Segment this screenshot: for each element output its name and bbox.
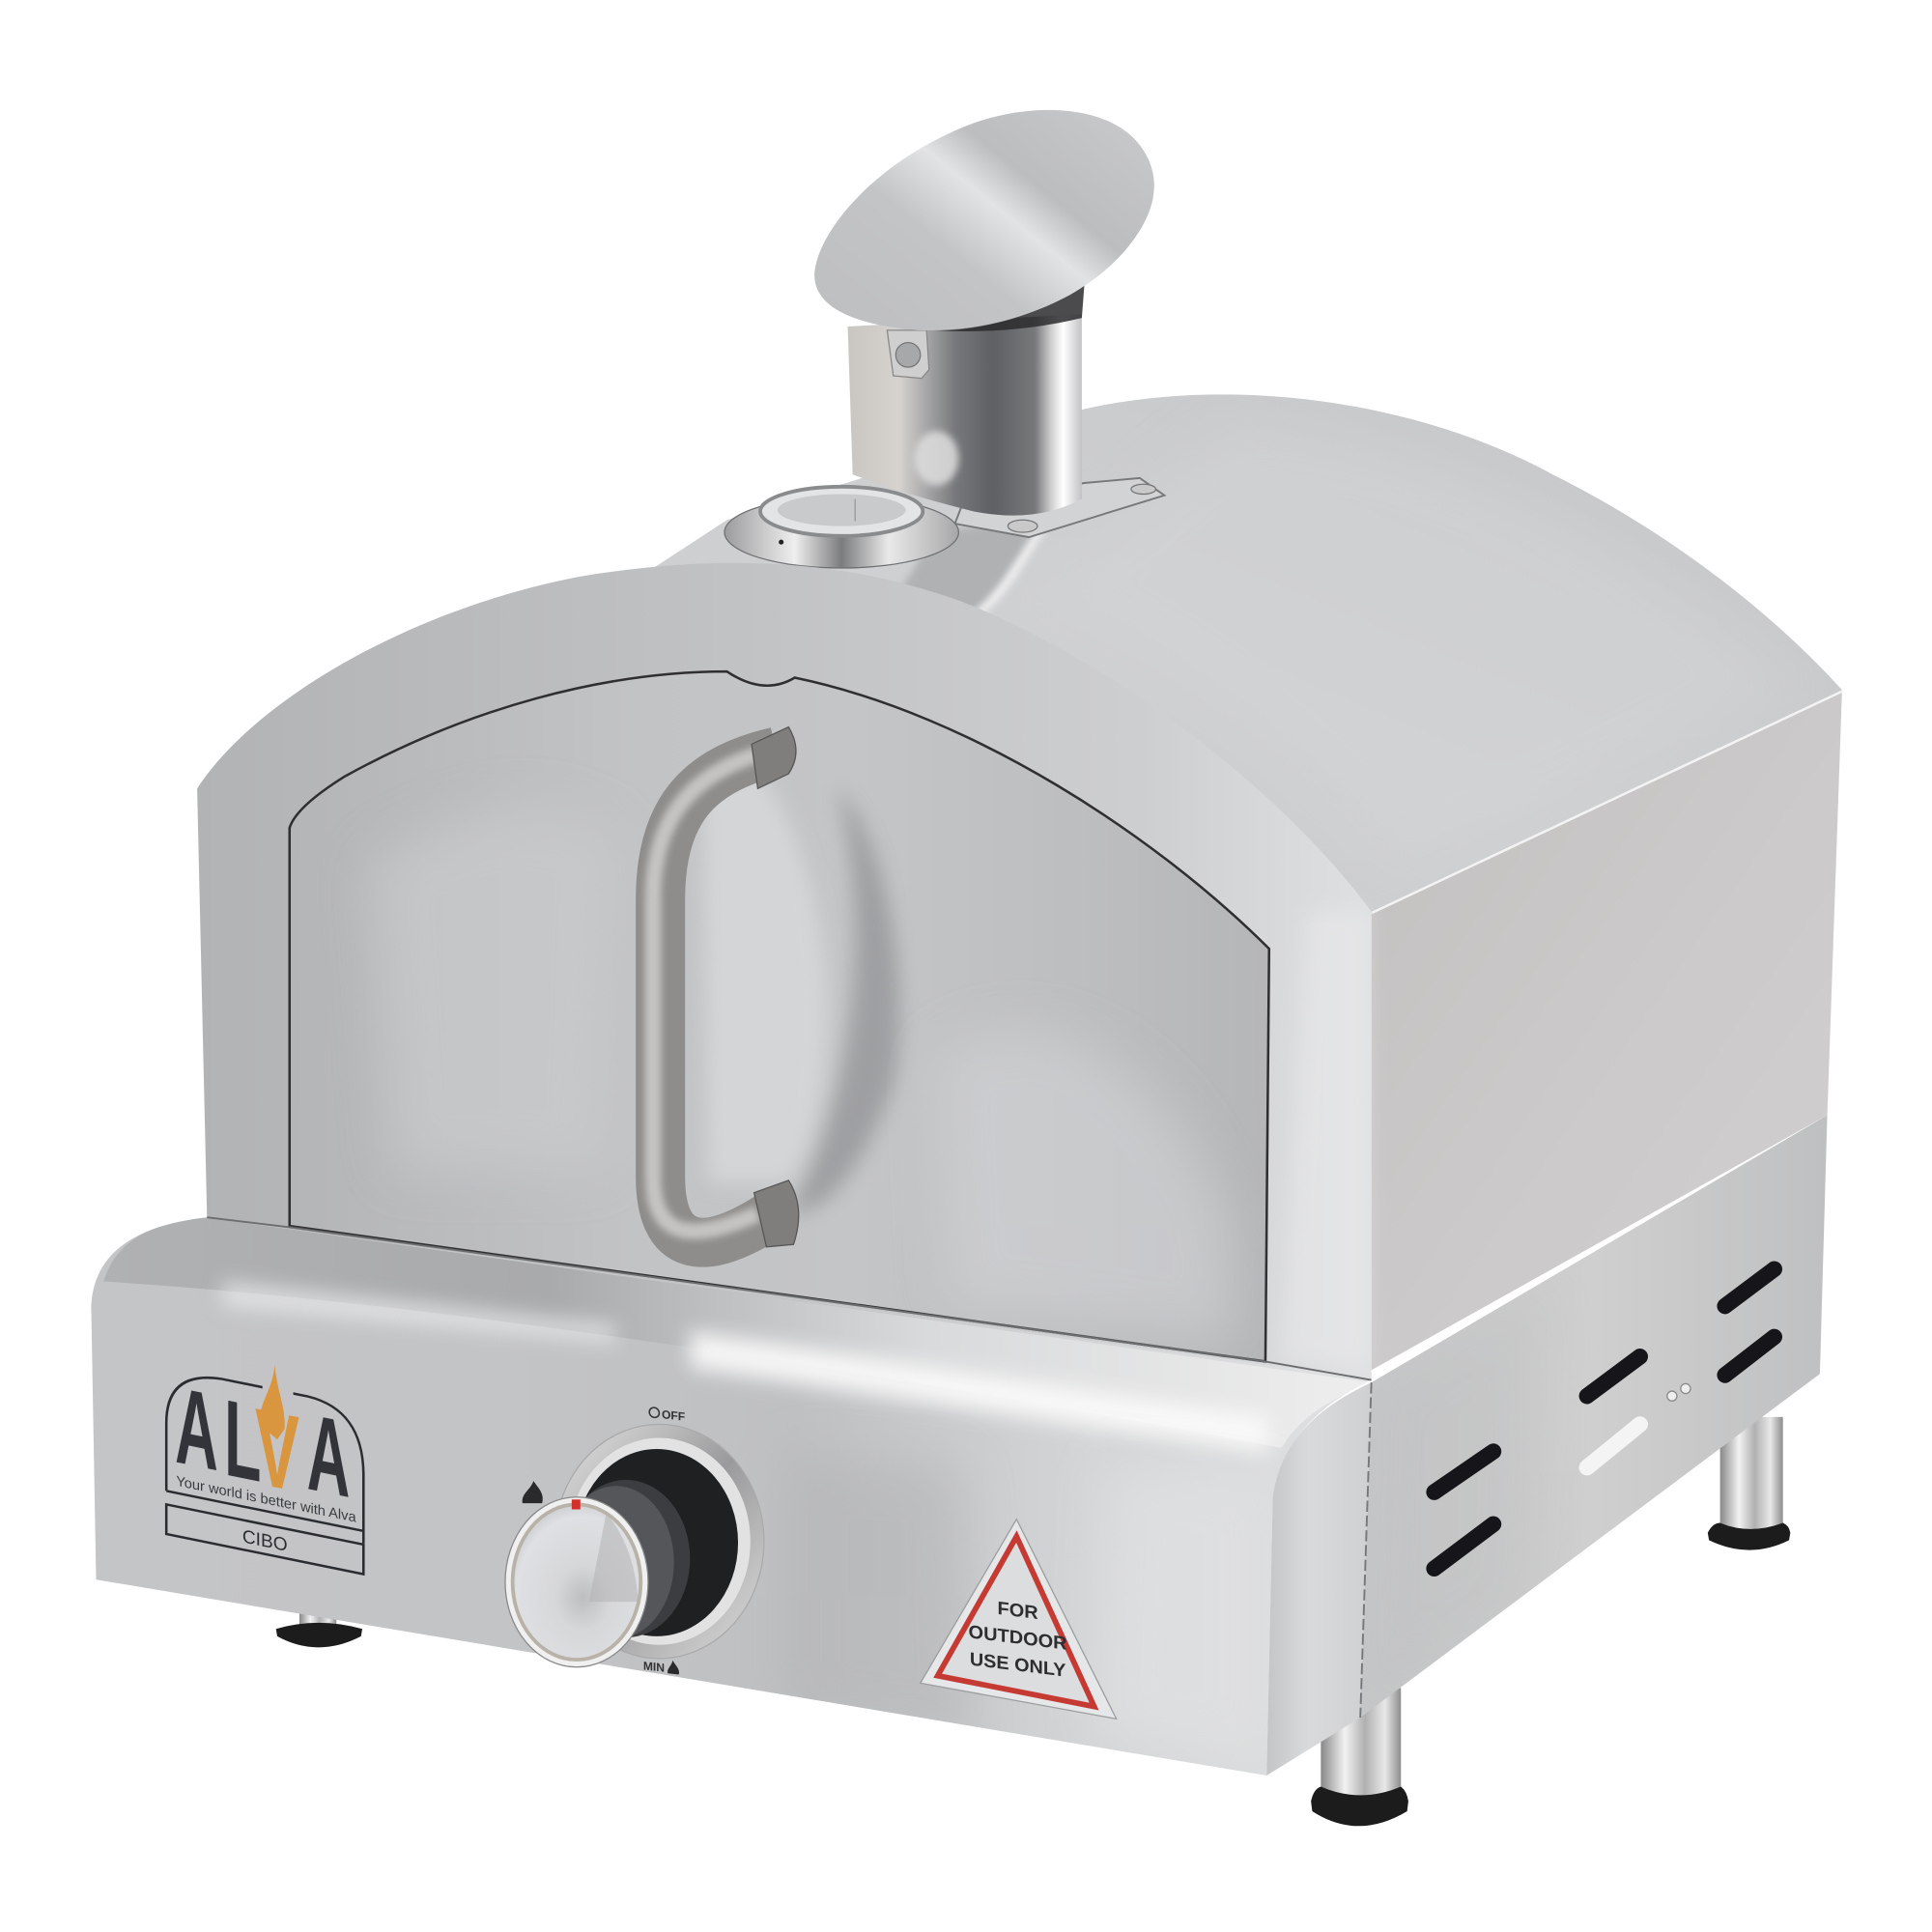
thermometer gauge (724, 487, 958, 568)
brand logo plate (166, 1343, 363, 1575)
flame (260, 1362, 285, 1441)
control knob assembly (505, 1406, 764, 1676)
min label (643, 1658, 679, 1676)
warning triangle label: OUTDOOR (969, 1622, 1067, 1655)
frame highlight (1282, 912, 1368, 1368)
model box (166, 1504, 363, 1575)
warning text: FOR (998, 1599, 1038, 1624)
pipe (848, 314, 1082, 516)
max flame icon (523, 1481, 543, 1503)
upper side panel (1372, 690, 1842, 1370)
seam line (1360, 1382, 1372, 1718)
light edge on upper side panel (1372, 690, 1842, 912)
back-right leg (1708, 1417, 1790, 1550)
mounting plate (955, 478, 1164, 537)
base unit front (91, 1217, 1372, 1776)
rivets (1667, 1391, 1677, 1401)
brand logo plate: A (307, 1391, 350, 1521)
min label: MIN (643, 1659, 665, 1675)
base highlights (222, 1282, 616, 1343)
chimney flue (814, 110, 1164, 537)
bezel (554, 1424, 764, 1659)
back-left foot (276, 1602, 362, 1647)
tagline: Your world is better with Alva (176, 1474, 356, 1526)
chimney cap (814, 110, 1154, 330)
shelf top (103, 1217, 1372, 1448)
warning triangle label: USE ONLY (970, 1650, 1066, 1682)
off label (649, 1406, 685, 1424)
knob brushed wedge (589, 1513, 639, 1602)
brand logo plate: L (224, 1377, 261, 1506)
knurled collar (562, 1480, 690, 1637)
oven door (290, 671, 1269, 1361)
off label: OFF (662, 1407, 685, 1424)
dome top surface (655, 394, 1842, 912)
warning triangle label (921, 1520, 1117, 1719)
knob face (505, 1497, 648, 1667)
brand logo plate: V (255, 1385, 299, 1516)
front-right leg (1311, 1688, 1408, 1826)
logo frame (166, 1368, 363, 1544)
door handle (653, 727, 799, 1247)
brand logo plate: CIBO (242, 1527, 288, 1556)
red indicator (572, 1499, 581, 1509)
lower side panel with vents (1360, 1115, 1828, 1718)
front arch frame (197, 563, 1372, 1380)
bracket and screw (887, 330, 929, 379)
logo word ALVA: A (175, 1364, 218, 1494)
door reflection (788, 788, 899, 1213)
vent slots (1435, 1269, 1775, 1569)
base corner wrap (1266, 1382, 1372, 1776)
